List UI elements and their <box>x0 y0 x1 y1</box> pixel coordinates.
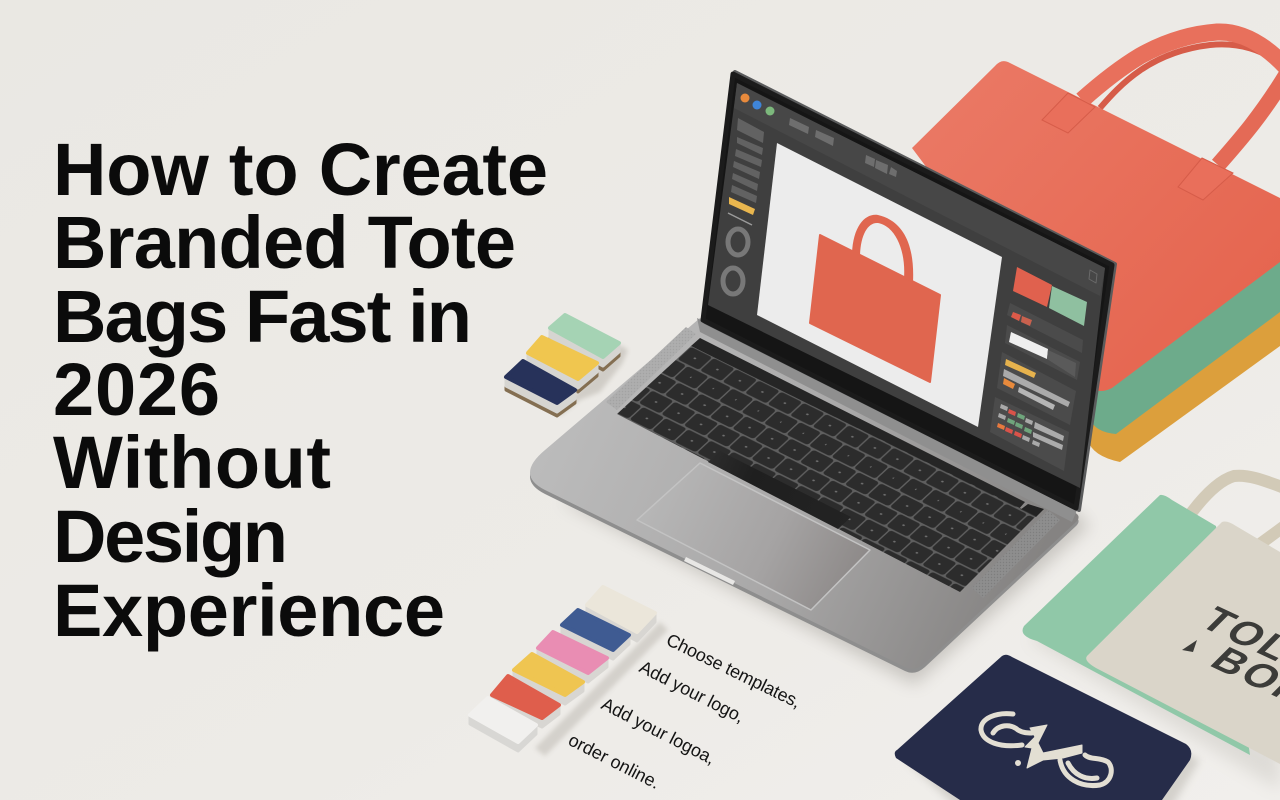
colour swatches <box>1013 267 1052 307</box>
stacked coral, green and yellow totes <box>912 32 1280 462</box>
navy tote shadow <box>905 665 1200 800</box>
title: How to Create <box>53 128 548 211</box>
green tote layer <box>1090 240 1280 434</box>
right coral handle <box>1218 72 1280 165</box>
coral tote body <box>912 61 1280 391</box>
swatch: red <box>492 676 559 727</box>
small swatch stack: green, yellow, navy <box>506 315 628 416</box>
title: Design <box>53 495 288 578</box>
grey input <box>1047 350 1076 377</box>
corner icon <box>1089 270 1097 283</box>
yellow slider <box>1005 359 1036 378</box>
toolbar buttons <box>789 118 897 177</box>
swatch: yellow <box>514 654 583 704</box>
step captions: Add your logoa, <box>598 694 719 768</box>
left tool panel <box>723 118 764 294</box>
natural tote handles <box>1192 476 1280 544</box>
right properties panel <box>990 267 1097 471</box>
design canvas <box>757 143 1002 427</box>
laptop base front edge <box>530 322 1079 673</box>
hinge <box>697 318 1077 522</box>
swatch: blue <box>562 610 629 659</box>
tote brand lettering <box>1182 601 1280 706</box>
small red chips <box>1011 312 1021 321</box>
title <box>53 128 548 652</box>
front coral handle <box>1082 32 1280 100</box>
title: 2026 <box>53 348 220 431</box>
swatch stack: six colours <box>470 587 668 756</box>
step captions: Choose templates, <box>663 630 804 712</box>
title: Bags Fast in <box>53 275 472 358</box>
front notch <box>684 557 735 585</box>
step captions: order online. <box>565 730 663 793</box>
power key <box>1020 504 1044 517</box>
title: Without <box>53 421 331 504</box>
title: Experience <box>53 569 445 652</box>
swatch stack shadow <box>535 622 668 756</box>
step captions: Add your logo, <box>636 657 748 727</box>
laptop shadow <box>560 500 1090 685</box>
key grid <box>617 346 1036 592</box>
left speaker grille <box>606 327 696 410</box>
swirl logo <box>981 714 1111 786</box>
swatch: navy <box>506 361 575 416</box>
orange chip <box>1003 378 1015 389</box>
right speaker grille <box>972 510 1060 598</box>
step captions <box>565 630 804 793</box>
swatch: yellow <box>528 337 597 392</box>
laptop base <box>530 318 1079 669</box>
tote shadow <box>1030 530 1280 790</box>
panel blocks <box>990 303 1083 471</box>
navy tote with logo <box>895 655 1200 800</box>
laptop <box>530 72 1115 685</box>
spacebar <box>708 451 851 529</box>
natural tote body <box>1086 522 1280 764</box>
green and natural canvas tote <box>1023 476 1280 790</box>
title: Branded Tote <box>53 201 516 284</box>
window dots <box>740 94 774 116</box>
white input <box>1009 332 1048 359</box>
yellow tote layer <box>1088 280 1280 462</box>
trackpad <box>637 463 870 610</box>
screen <box>708 83 1105 488</box>
laptop lid rim <box>705 72 1115 510</box>
green tote <box>1023 495 1250 755</box>
coral tote handle patches <box>1042 93 1233 200</box>
function strip <box>691 338 1025 510</box>
grey bar <box>1018 387 1055 410</box>
rear coral handle <box>1100 44 1280 108</box>
keyboard <box>617 338 1044 592</box>
grey slider <box>1003 369 1070 407</box>
grid side bars <box>1034 422 1064 441</box>
colour grid <box>997 404 1040 447</box>
swatch: white <box>470 698 536 751</box>
swatch: cream <box>587 587 655 641</box>
navy tote body <box>895 655 1191 800</box>
swatch: green <box>550 315 619 370</box>
laptop lid <box>703 74 1112 508</box>
bag icon on canvas <box>810 215 940 382</box>
swatch: pink <box>538 632 607 682</box>
swatch shadow <box>557 345 628 416</box>
toolbar band <box>734 83 1105 296</box>
